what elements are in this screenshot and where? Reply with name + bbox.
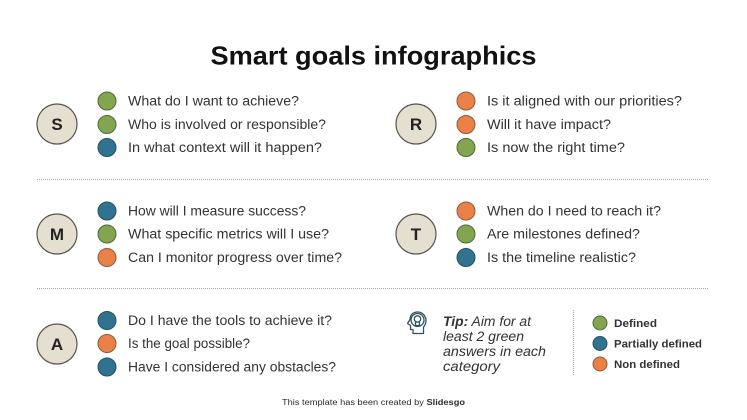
answer: S2 defined — [98, 116, 326, 134]
legend — [593, 316, 702, 371]
answer: M1 partially defined: How will I measure success? — [128, 204, 306, 218]
answer: S3 partially defined — [98, 138, 322, 156]
tip text — [443, 314, 546, 374]
answer: M3 non defined: Can I monitor progress over time? — [128, 250, 342, 265]
answer: T2 defined — [457, 225, 640, 243]
badge: A: A — [51, 335, 63, 354]
tip text: category — [443, 359, 501, 374]
panel: S — [37, 92, 326, 156]
answer: M3 non defined — [98, 248, 342, 266]
badge: T: T — [411, 225, 422, 244]
answer: T3 partially defined — [457, 248, 636, 266]
answer: S3 partially defined: In what context will it happen? — [128, 140, 322, 155]
panel: R — [396, 92, 682, 156]
answer: S1 defined: What do I want to achieve? — [128, 94, 299, 108]
answer: A2 non defined: Is the goal possible? — [128, 336, 250, 351]
answer: M1 partially defined — [98, 202, 306, 220]
badge: M: M — [50, 225, 64, 244]
badge: A — [37, 324, 77, 364]
tip text: answers in each — [443, 344, 546, 359]
badge: R: R — [410, 115, 422, 134]
answer: R2 non defined — [457, 116, 611, 134]
answer: S1 defined — [98, 92, 299, 110]
answer: M2 defined — [98, 225, 329, 243]
answer: A1 partially defined: Do I have the tools to achieve it? — [128, 313, 332, 328]
answer: M2 defined: What specific metrics will I use? — [128, 226, 329, 242]
tip text: Tip: Aim for at — [443, 314, 532, 329]
answer: A3 partially defined: Have I considered any obstacles? — [128, 360, 336, 374]
answer: R1 non defined — [457, 92, 682, 110]
answer: T3 partially defined: Is the timeline realistic? — [487, 250, 636, 265]
answer: S2 defined: Who is involved or responsible? — [128, 117, 326, 132]
footer credit: This template has been created by Slidesgo — [282, 398, 465, 407]
badge: M — [37, 214, 77, 254]
answer: T1 non defined — [457, 202, 661, 220]
icon: head with lightbulb — [408, 312, 426, 334]
legend: defined: Defined — [614, 318, 657, 330]
answer: R2 non defined: Will it have impact? — [487, 117, 611, 132]
answer: T1 non defined: When do I need to reach it? — [487, 204, 661, 218]
answer: R3 defined: Is now the right time? — [487, 140, 625, 155]
panel: T — [396, 202, 661, 266]
answer: A2 non defined — [98, 334, 250, 352]
answer: R3 defined — [457, 138, 625, 156]
title: Smart goals infographics — [210, 40, 536, 70]
panel: M — [37, 202, 342, 266]
panel: A — [37, 312, 336, 376]
badge: S: S — [51, 115, 63, 134]
answer: T2 defined: Are milestones defined? — [487, 226, 640, 242]
legend: partially defined: Partially defined — [614, 338, 702, 350]
badge: S — [37, 104, 77, 144]
legend: non defined: Non defined — [614, 359, 680, 371]
badge: R — [396, 104, 436, 144]
badge: T — [396, 214, 436, 254]
tip text: least 2 green — [443, 329, 524, 344]
answer: R1 non defined: Is it aligned with our priorities? — [487, 94, 682, 108]
answer: A1 partially defined — [98, 312, 332, 330]
